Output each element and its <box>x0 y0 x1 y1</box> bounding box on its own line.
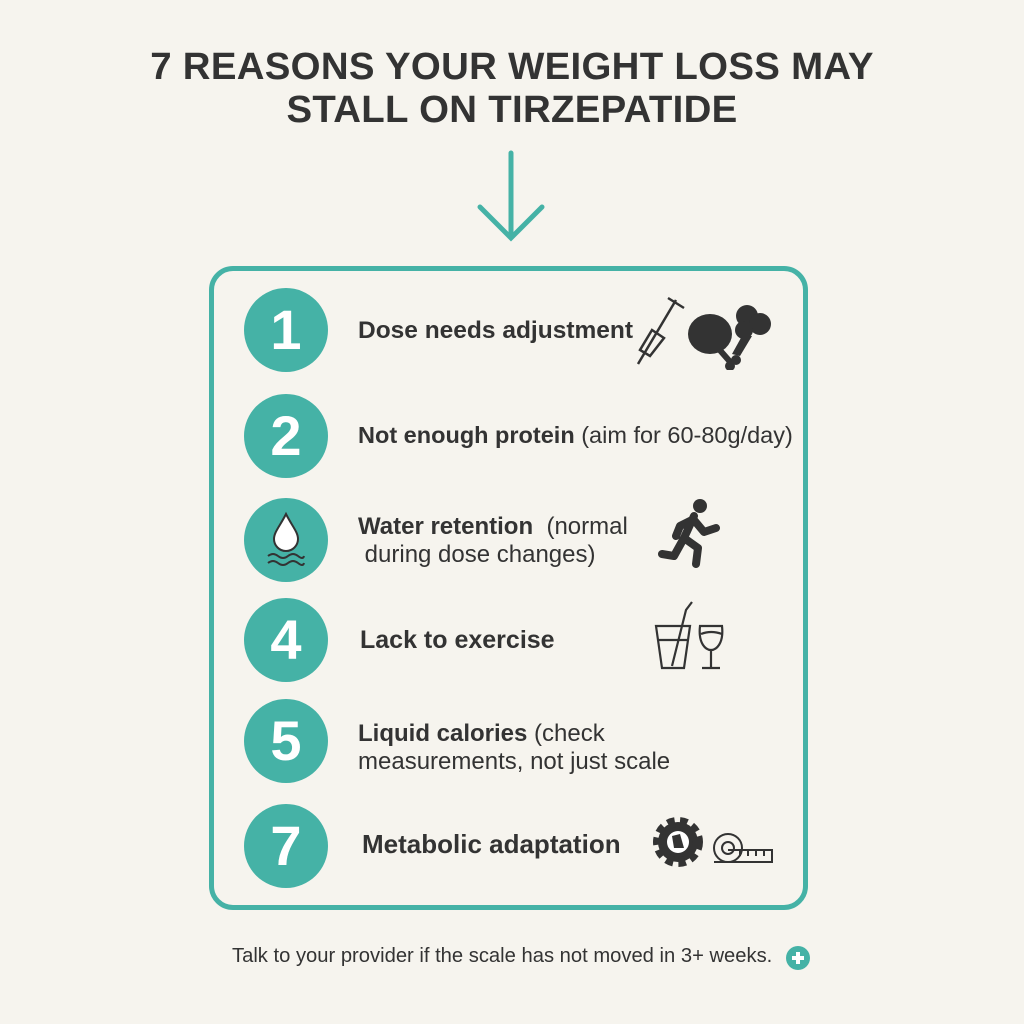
title: STALL ON TIRZEPATIDE <box>286 88 738 131</box>
icon: water drop circle <box>244 498 328 582</box>
text: Water retention (normal <box>358 513 628 540</box>
text: 1 <box>270 298 302 361</box>
item 1 <box>244 288 771 372</box>
text: measurements, not just scale <box>358 748 670 775</box>
icon: syringe, drumstick, broccoli <box>637 297 771 370</box>
panel: reasons <box>209 266 808 910</box>
text: during dose changes) <box>365 541 596 568</box>
text: Dose needs adjustment <box>358 317 633 344</box>
text: 5 <box>270 709 302 772</box>
item 2 <box>244 394 793 478</box>
text: 4 <box>270 608 302 671</box>
item 3 <box>244 498 720 582</box>
icon: drinks <box>654 601 724 670</box>
text: Not enough protein (aim for 60-80g/day) <box>358 422 793 448</box>
icon: runner <box>658 499 720 568</box>
footer note: Talk to your provider if the scale has not moved in 3+ weeks. <box>232 945 772 967</box>
text: 2 <box>270 404 302 467</box>
icon: plus <box>786 946 810 970</box>
text: 7 <box>270 814 302 877</box>
text: Metabolic adaptation <box>362 829 621 859</box>
item 7 <box>244 804 773 888</box>
arrow <box>478 150 544 242</box>
item 5 <box>244 699 670 783</box>
text: Liquid calories (check <box>358 720 605 747</box>
title <box>150 45 874 131</box>
icon: gear and tape measure <box>653 817 773 867</box>
item 4 <box>244 598 724 682</box>
title: 7 REASONS YOUR WEIGHT LOSS MAY <box>150 45 874 88</box>
text: Lack to exercise <box>360 626 555 654</box>
